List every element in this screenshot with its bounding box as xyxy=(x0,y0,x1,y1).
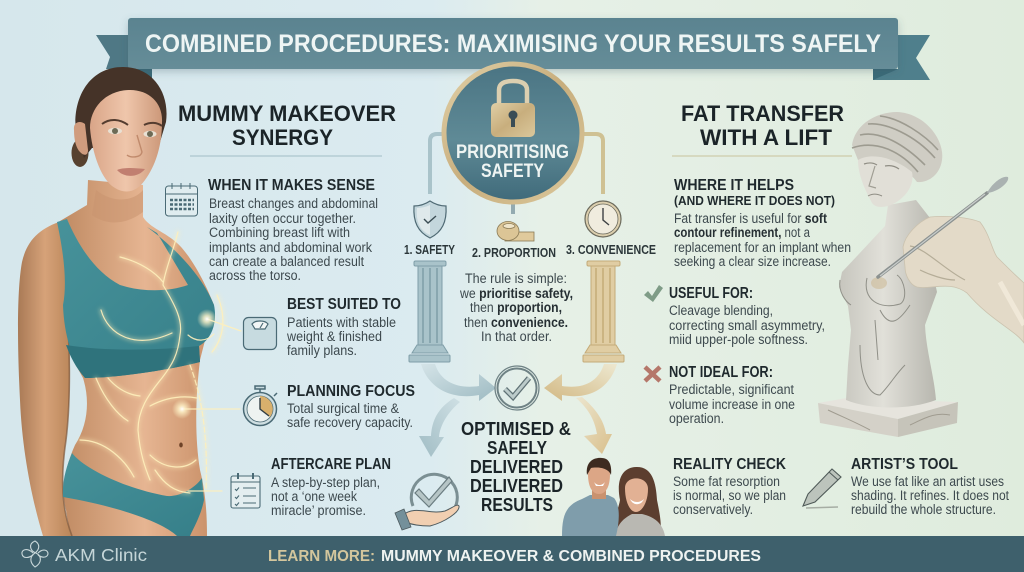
text: not ideal for xyxy=(669,364,795,426)
text: when it makes sense: Breast changes and abdominal xyxy=(209,196,378,211)
text: the rule: then convenience. xyxy=(464,315,568,330)
text: best suited to: family plans. xyxy=(287,343,357,358)
icon: check in open hand xyxy=(395,474,459,530)
text: aftercare plan: not a ‘one week xyxy=(271,489,357,504)
heading: mummy makeover: MUMMY MAKEOVER xyxy=(178,101,396,126)
text: not ideal for: volume increase in one xyxy=(669,397,795,412)
text: best suited to xyxy=(286,296,401,358)
neck shading xyxy=(92,190,143,222)
text: artist's tool: ARTIST’S TOOL xyxy=(851,456,958,473)
text: when it makes sense: can create a balanced result xyxy=(209,254,364,269)
text: not ideal for: NOT IDEAL FOR: xyxy=(669,364,773,381)
arrow: safety to result xyxy=(421,364,496,401)
heading: optimised: OPTIMISED & xyxy=(461,419,571,439)
heading: fat transfer: FAT TRANSFER xyxy=(681,101,844,126)
heading: optimised xyxy=(461,419,571,515)
arrow: down right xyxy=(576,397,612,454)
statue base xyxy=(818,398,958,437)
safety hub: prioritising safety xyxy=(430,64,603,214)
text: the rule: then proportion, xyxy=(470,300,562,315)
text: where it helps: WHERE IT HELPS xyxy=(674,177,794,194)
heading: prioritising safety xyxy=(456,142,569,182)
text: planning focus: Total surgical time & xyxy=(287,401,399,416)
text: when it makes sense: Combining breast lift with xyxy=(209,225,350,240)
text: when it makes sense: WHEN IT MAKES SENSE xyxy=(208,177,375,194)
icon: red cross xyxy=(645,367,660,381)
heading: optimised: SAFELY xyxy=(487,438,547,458)
text: aftercare plan: A step-by-step plan, xyxy=(271,475,380,490)
text: when it makes sense: implants and abdominal work xyxy=(209,240,372,255)
title: COMBINED PROCEDURES: MAXIMISING YOUR RESULTS SAFELY xyxy=(145,30,881,58)
icon: green check xyxy=(644,285,663,302)
heading: prioritising safety: SAFETY xyxy=(481,161,544,182)
text: when it makes sense: across the torso. xyxy=(209,268,301,283)
panel: mummy makeover synergy xyxy=(166,101,459,530)
text: useful for: Cleavage blending, xyxy=(669,303,773,318)
pillar 2: proportion: 2. PROPORTION xyxy=(472,245,556,260)
heading: optimised: DELIVERED xyxy=(470,457,563,477)
heading: fat transfer xyxy=(672,101,852,156)
text: the rule: In that order. xyxy=(481,329,552,344)
text: aftercare plan: AFTERCARE PLAN xyxy=(271,456,391,473)
arrow: down left xyxy=(419,398,460,457)
heading: prioritising safety: PRIORITISING xyxy=(456,142,569,163)
pillar 1: safety: 1. SAFETY xyxy=(404,242,455,257)
pillar 3: convenience xyxy=(566,201,656,362)
text: best suited to: BEST SUITED TO xyxy=(287,296,401,313)
text: where it helps: replacement for an implant when xyxy=(674,240,851,255)
illustration: smiling couple xyxy=(562,458,665,536)
text: reality check: Some fat resorption xyxy=(673,474,780,489)
icon: weighing scale xyxy=(244,318,276,350)
text: the rule: The rule is simple: xyxy=(465,271,567,286)
panel: fat transfer with a lift xyxy=(644,101,1024,517)
icon: checklist xyxy=(231,473,260,508)
text: planning focus xyxy=(287,383,415,430)
text: artist's tool: rebuild the whole structure. xyxy=(851,502,996,517)
pillar 1: safety xyxy=(404,201,455,362)
logo: AKM Clinic xyxy=(55,545,147,565)
text: planning focus: PLANNING FOCUS xyxy=(287,383,415,400)
text: artist's tool xyxy=(851,456,1009,517)
text: not ideal for: Predictable, significant xyxy=(669,382,794,397)
head xyxy=(72,67,167,192)
text: aftercare plan xyxy=(271,456,391,518)
text: reality check: is normal, so we plan xyxy=(673,488,786,503)
icon: pencil xyxy=(803,469,841,508)
text: artist's tool: We use fat like an artist uses xyxy=(851,474,1004,489)
icon: check circle xyxy=(495,366,539,410)
torso xyxy=(60,180,214,536)
teal briefs xyxy=(63,453,204,536)
icon: calendar xyxy=(166,183,198,216)
text: planning focus: safe recovery capacity. xyxy=(287,415,413,430)
footer bar xyxy=(0,536,1024,572)
text: reality check: REALITY CHECK xyxy=(673,456,787,473)
text: where it helps: Fat transfer is useful for soft xyxy=(674,211,827,226)
result: optimised and safely delivered xyxy=(419,364,665,536)
call to action: LEARN MORE: xyxy=(268,548,375,565)
text: where it helps: (AND WHERE IT DOES NOT) xyxy=(674,193,835,208)
text: aftercare plan: miracle’ promise. xyxy=(271,503,366,518)
icon: stopwatch xyxy=(244,386,277,426)
arrow: convenience to result xyxy=(544,364,617,401)
icon: padlock xyxy=(491,81,535,137)
text: reality check xyxy=(673,456,787,517)
title banner xyxy=(96,18,930,80)
text: useful for: miid upper-pole softness. xyxy=(669,332,808,347)
connectors xyxy=(430,134,603,214)
navel xyxy=(179,442,183,448)
text: useful for: USEFUL FOR: xyxy=(669,285,753,302)
logo xyxy=(22,541,147,567)
text: where it helps: seeking a clear size increase. xyxy=(674,254,831,269)
heading: mummy makeover: SYNERGY xyxy=(232,125,333,150)
text: useful for: correcting small asymmetry, xyxy=(669,318,825,333)
sculpting tool xyxy=(878,177,1008,277)
text: best suited to: weight & finished xyxy=(286,329,382,344)
icon: measuring tape xyxy=(497,222,534,241)
arm xyxy=(18,221,72,536)
text: the rule xyxy=(459,271,573,344)
text: when it makes sense xyxy=(208,177,378,283)
illustration: marble statue and gloved hand xyxy=(818,112,1024,437)
man xyxy=(562,495,619,536)
illustration: woman with glowing treatment lines xyxy=(18,67,241,536)
teal sports top xyxy=(57,219,215,378)
woman xyxy=(612,467,661,536)
icon: clock xyxy=(585,201,621,237)
pillar 3: convenience: 3. CONVENIENCE xyxy=(566,242,656,257)
column: blue xyxy=(409,261,450,362)
text: best suited to: Patients with stable xyxy=(287,315,396,330)
icon: shield xyxy=(414,201,446,238)
heading: optimised: DELIVERED xyxy=(470,476,563,496)
text: artist's tool: shading. It refines. It does not xyxy=(851,488,1009,503)
heading: optimised: RESULTS xyxy=(481,495,553,515)
column: gold xyxy=(583,261,624,362)
heading: fat transfer: WITH A LIFT xyxy=(700,125,833,150)
call to action: MUMMY MAKEOVER & COMBINED PROCEDURES xyxy=(381,548,761,565)
text: the rule: we prioritise safety, xyxy=(459,286,573,301)
glowing lines xyxy=(80,232,241,493)
text: not ideal for: operation. xyxy=(669,411,724,426)
text: useful for xyxy=(669,285,825,347)
heading: mummy makeover xyxy=(178,101,396,156)
text: where it helps xyxy=(674,177,851,269)
gloved hand xyxy=(903,216,1024,343)
text: where it helps: contour refinement, not a xyxy=(674,225,810,240)
text: reality check: conservatively. xyxy=(673,502,753,517)
pillar 2: proportion xyxy=(459,222,573,344)
text: when it makes sense: laxity often occur together. xyxy=(209,211,356,226)
